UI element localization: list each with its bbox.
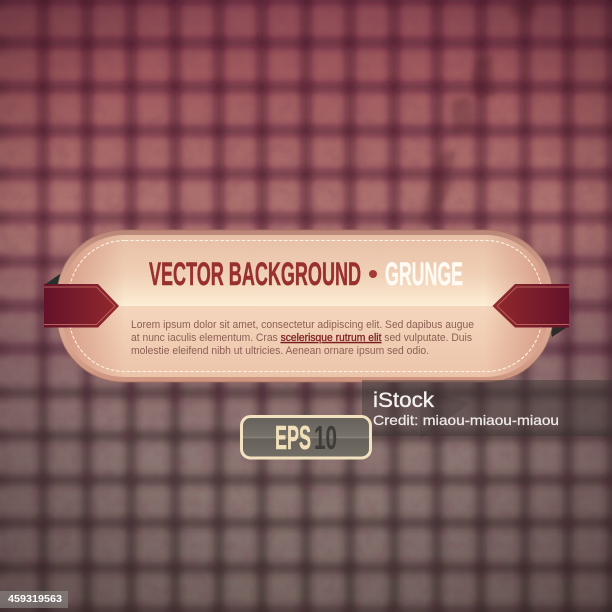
watermark credit: Credit: miaou-miaou-miaou	[373, 412, 559, 428]
body text	[131, 319, 474, 357]
heading: VECTOR BACKGROUND	[149, 256, 361, 292]
image id tag: 459319563	[8, 594, 62, 605]
panel face	[62, 235, 548, 377]
watermark band	[362, 380, 612, 440]
EPS badge	[242, 416, 370, 458]
image id tag	[0, 591, 68, 608]
EPS badge: EPS	[275, 419, 311, 456]
right ribbon	[492, 284, 569, 328]
body text: at nunc iaculis elementum. Cras scelerisque rutrum elit sed vulputate. Duis	[131, 332, 472, 344]
watermark logo: iStock	[373, 389, 435, 412]
stitching	[69, 240, 542, 372]
body text: molestie eleifend nibh ut ultricies. Aenean ornare ipsum sed odio.	[131, 345, 429, 357]
bullet	[369, 270, 377, 278]
label panel with ribbons	[44, 230, 569, 382]
left ribbon	[44, 284, 119, 328]
panel rim	[57, 230, 553, 382]
body text: Lorem ipsum dolor sit amet, consectetur adipiscing elit. Sed dapibus augue	[131, 319, 474, 331]
ribbon fold: left	[44, 274, 62, 290]
EPS badge: 10	[314, 419, 337, 456]
heading: GRUNGE	[385, 256, 463, 292]
ribbon fold: right	[549, 322, 569, 337]
